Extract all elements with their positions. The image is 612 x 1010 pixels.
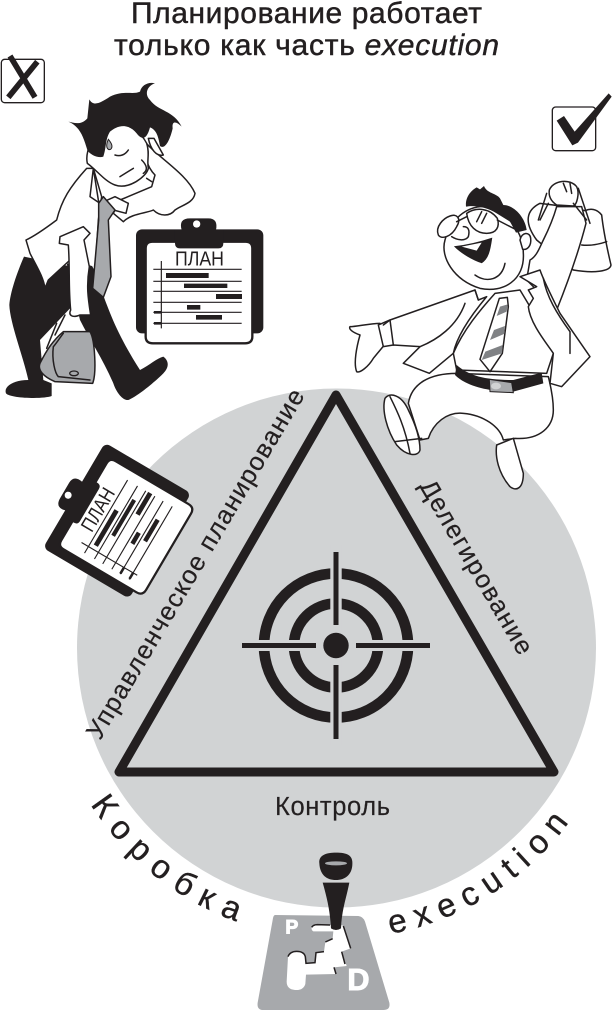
label: Делегирование: Делегирование — [414, 475, 538, 660]
trousers — [408, 373, 553, 440]
icon: target — [236, 545, 436, 745]
face — [87, 123, 148, 186]
icon: checked box — [552, 93, 612, 151]
striped tie — [480, 297, 508, 372]
hand and handles — [549, 181, 578, 206]
left shoe — [384, 395, 420, 455]
icon: gear shifter — [258, 853, 390, 1010]
label: Управленческое планирование: Управленческое планирование — [81, 384, 310, 744]
right shoe — [496, 438, 523, 489]
glasses — [438, 209, 517, 237]
trousers — [6, 257, 168, 400]
nose — [452, 227, 469, 240]
belt — [455, 365, 543, 393]
icon: gear shifter: P — [285, 917, 298, 938]
shirt — [26, 168, 102, 288]
title — [114, 0, 499, 62]
shirt — [453, 290, 553, 373]
hair — [466, 186, 527, 233]
outstretched hand — [350, 323, 387, 372]
figure: tired man with plan — [6, 83, 263, 400]
open mouth — [455, 238, 492, 263]
lower arm — [59, 227, 91, 316]
collar and shirt lines — [90, 168, 128, 220]
necktie — [93, 197, 115, 297]
figure: happy man — [350, 181, 611, 489]
icon: crossed box — [1, 56, 44, 103]
sweat drop — [107, 139, 112, 150]
raised bag — [528, 203, 611, 272]
ear — [520, 234, 531, 249]
head — [444, 207, 523, 289]
title: только как часть execution — [114, 29, 499, 62]
label: Контроль: Контроль — [275, 793, 390, 821]
raised arm — [113, 140, 195, 222]
label: ПЛАН: ПЛАН — [175, 247, 224, 270]
hand on head — [148, 138, 163, 155]
label: execution: execution — [389, 814, 568, 933]
triangle — [119, 395, 554, 772]
label: ПЛАН: ПЛАН — [77, 484, 120, 536]
jacket — [378, 290, 487, 373]
icon: gear shifter: D — [347, 963, 369, 997]
hair — [68, 83, 182, 157]
label: Коробка: Коробка — [92, 793, 239, 922]
panel: grey circle — [77, 388, 596, 908]
straight clipboard — [136, 218, 263, 343]
icon: rotated clipboard — [34, 437, 200, 604]
raised arm — [527, 207, 586, 310]
bag — [39, 315, 95, 383]
